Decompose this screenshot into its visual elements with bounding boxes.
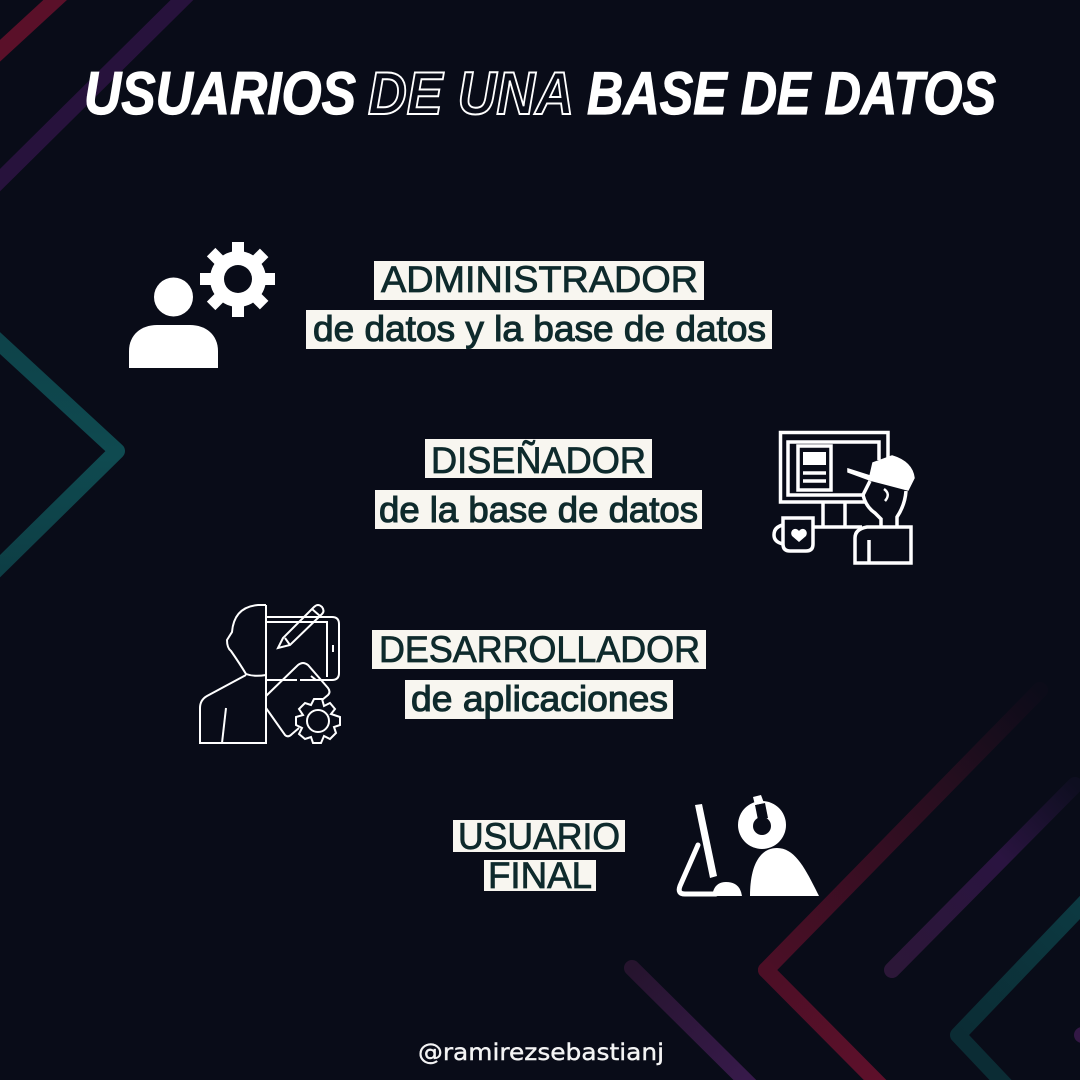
footer handle: @ramirezsebastianj: [418, 1040, 664, 1066]
icon: administrator with gear: [129, 242, 275, 368]
label: diseñador: DISEÑADOR: [431, 440, 646, 481]
label: administrador: de datos y la base de datos: [313, 308, 766, 349]
icon: application developer: [200, 605, 340, 743]
label: usuario final: FINAL: [488, 855, 592, 896]
title: [84, 60, 996, 127]
label: administrador: ADMINISTRADOR: [381, 259, 698, 300]
icon: end user at computer: [679, 795, 819, 896]
label: usuario final: [453, 816, 625, 896]
label: usuario final: USUARIO: [458, 816, 620, 857]
title: USUARIOS: [84, 60, 356, 127]
label: desarrollador: de aplicaciones: [411, 678, 668, 719]
label: diseñador: de la base de datos: [379, 489, 698, 530]
label: diseñador: [375, 439, 702, 530]
label: administrador: [306, 259, 772, 349]
title: DE UNA: [368, 60, 574, 127]
title: BASE DE DATOS: [587, 60, 996, 127]
label: desarrollador: [372, 629, 706, 719]
icon: designer at monitor: [774, 432, 914, 563]
label: desarrollador: DESARROLLADOR: [379, 629, 700, 670]
